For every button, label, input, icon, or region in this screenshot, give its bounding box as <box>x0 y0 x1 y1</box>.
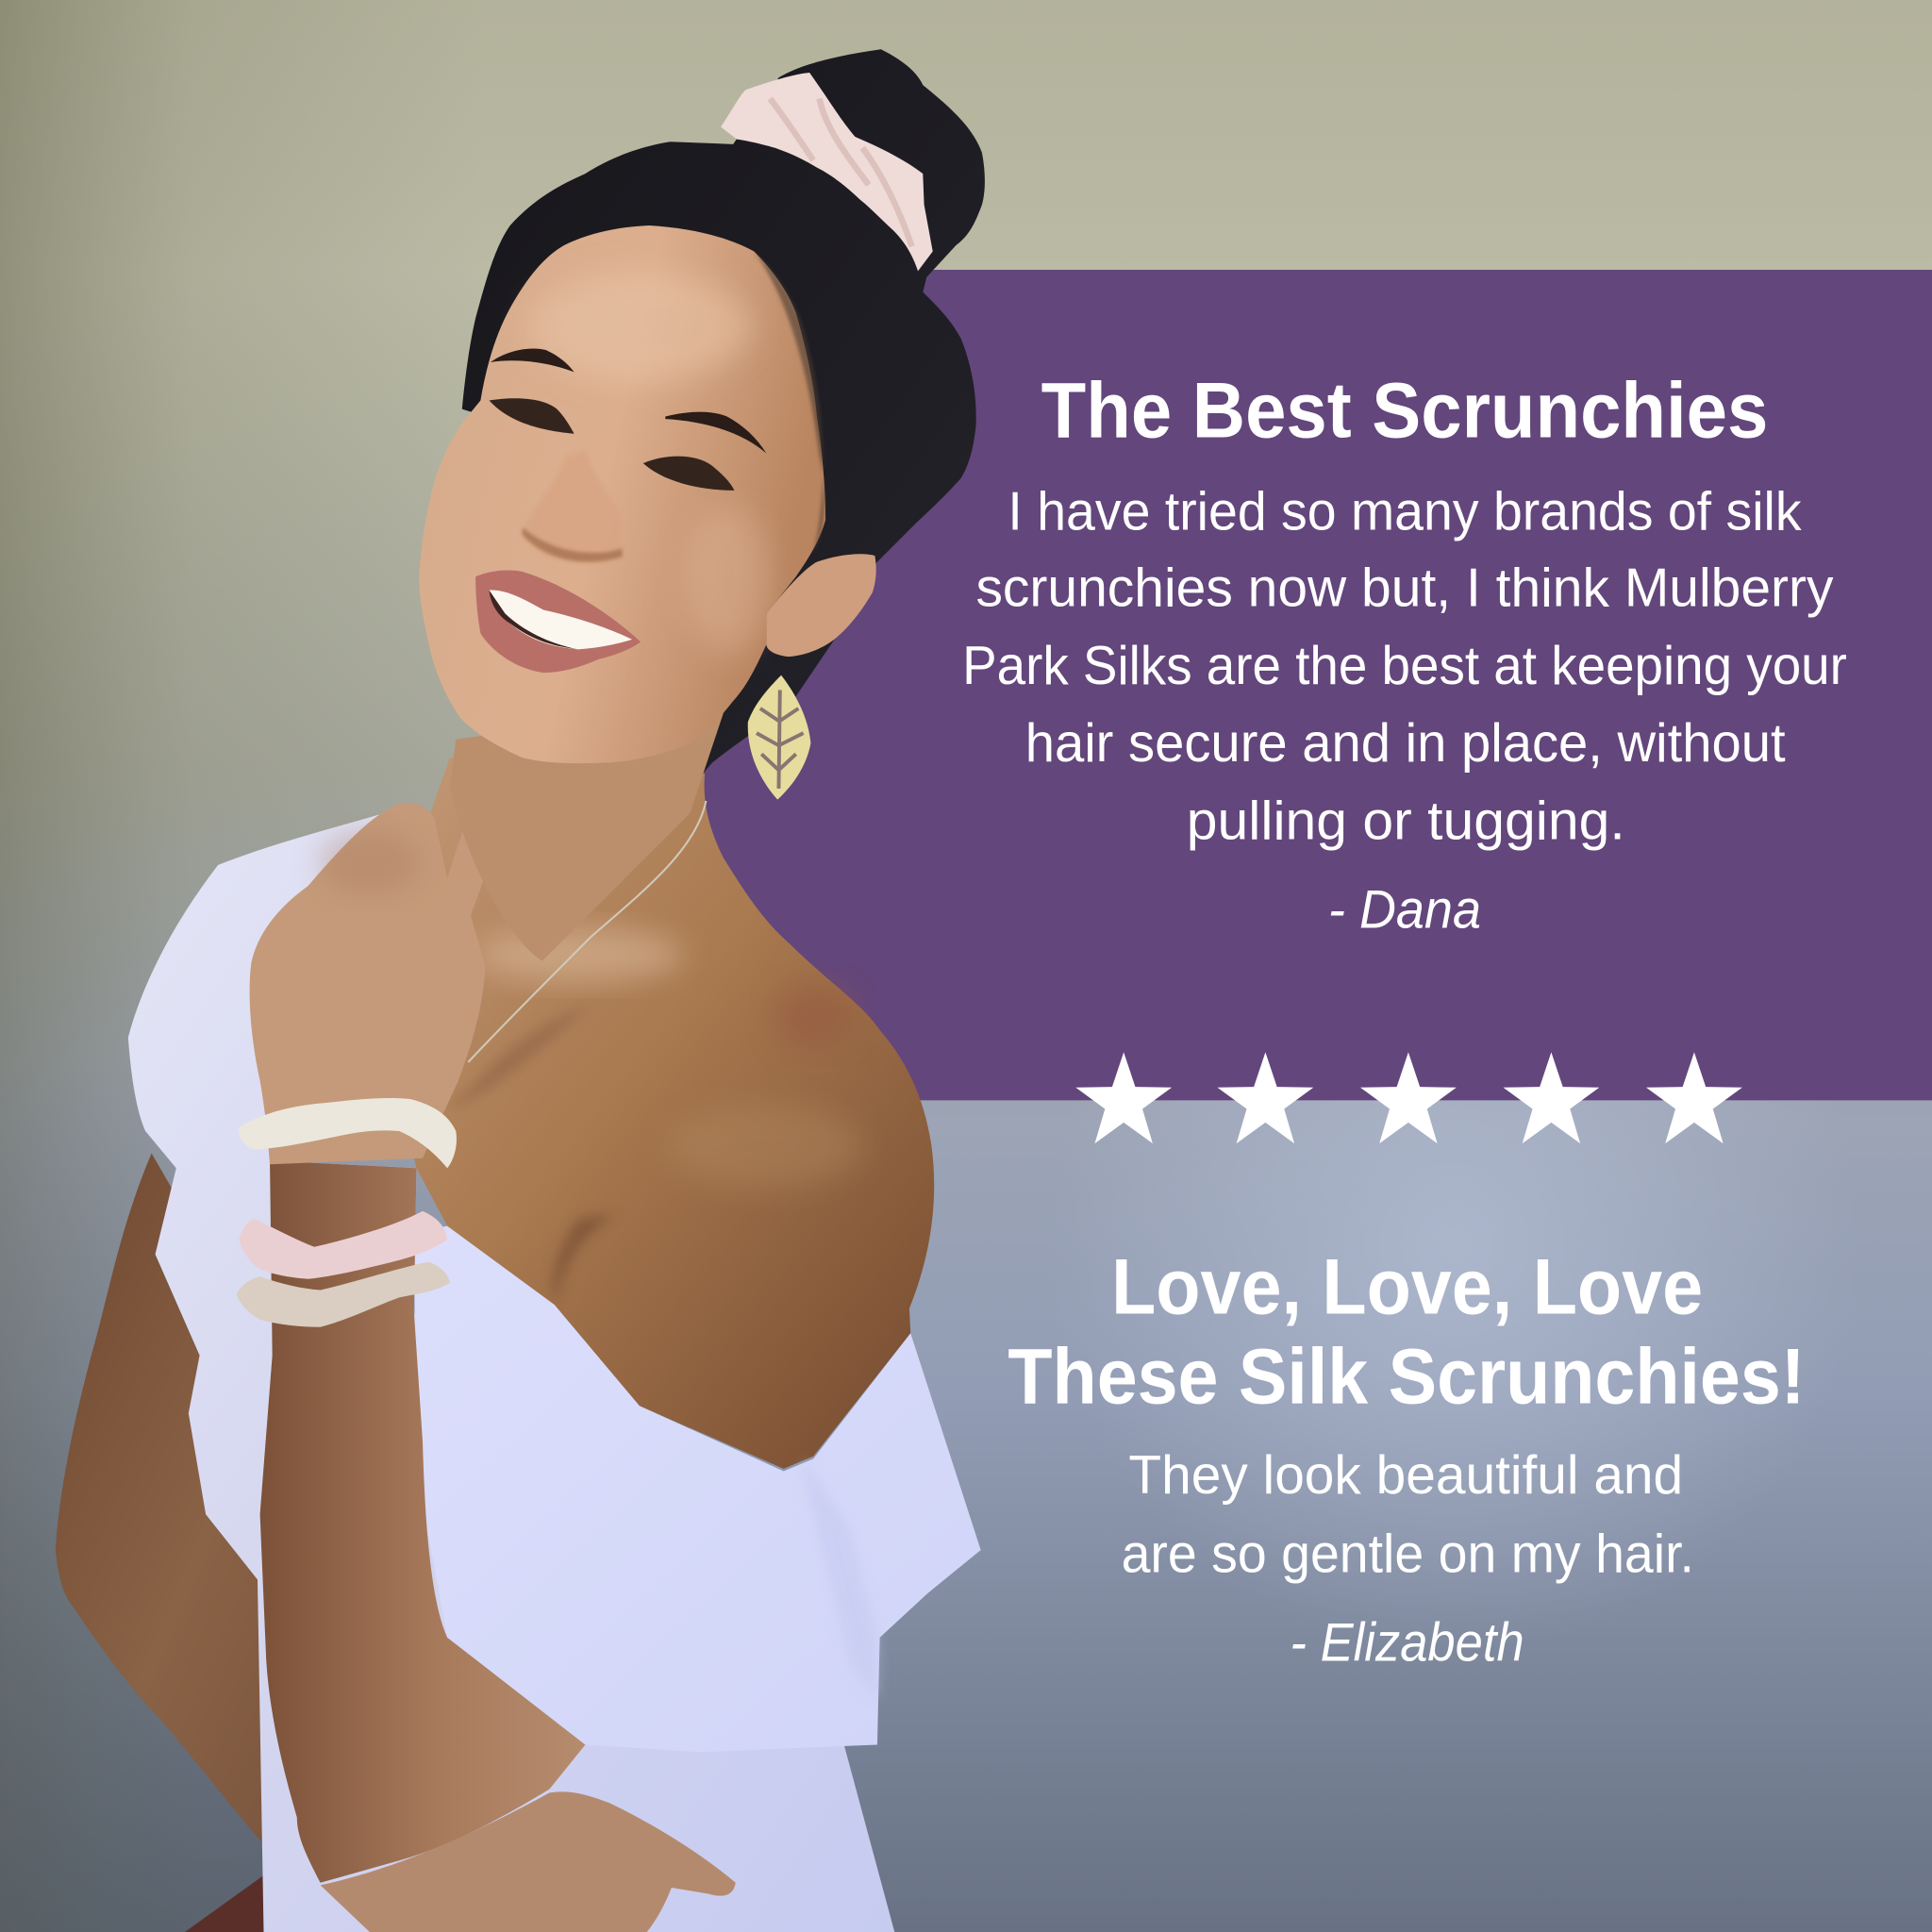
smiling mouth <box>475 570 641 673</box>
chest and shoulder <box>370 758 934 1469</box>
beige scrunchie <box>237 1261 450 1327</box>
review text <box>962 482 1847 851</box>
heading: Love, Love, Love These Silk Scrunchies! <box>1008 1241 1805 1421</box>
ear <box>766 554 876 657</box>
heading: Love, Love, Love These Silk Scrunchies!: Love, Love, Love <box>1111 1241 1703 1330</box>
wrist scrunchies <box>237 1098 457 1327</box>
earring <box>748 675 810 800</box>
review text: are so gentle on my hair. <box>1122 1524 1694 1585</box>
neck shadow <box>450 702 727 961</box>
attribution: Dana: - Dana <box>1328 880 1481 941</box>
review text: pulling or tugging. <box>1187 791 1625 851</box>
review text: They look beautiful and <box>1128 1445 1683 1506</box>
five star rating <box>1075 1052 1742 1143</box>
necklace <box>468 801 706 1062</box>
nose <box>523 450 624 564</box>
eyes and brows <box>490 348 766 491</box>
review text: I have tried so many brands of silk <box>1008 482 1802 542</box>
pink scrunchie <box>239 1211 447 1279</box>
review: Elizabeth <box>1008 1241 1805 1674</box>
review text <box>1122 1445 1694 1585</box>
hair back and bun <box>462 49 985 789</box>
woman photo illustration <box>56 49 985 1932</box>
review text: Park Silks are the best at keeping your <box>962 636 1847 696</box>
fist and thumb at neck <box>250 796 502 1164</box>
hair scrunchie <box>721 73 933 271</box>
arm: front forearm <box>260 1160 585 1883</box>
hand on waist <box>321 1791 736 1932</box>
heading: The Best Scrunchies: The Best Scrunchies <box>1041 366 1768 455</box>
dress ruffle <box>414 1226 981 1752</box>
face <box>419 225 825 763</box>
review text: scrunchies now but, I think Mulberry <box>975 558 1834 619</box>
review: Dana <box>962 366 1847 941</box>
dress body and sleeve <box>128 810 894 1932</box>
white scrunchie <box>239 1098 457 1168</box>
arm: rear upper arm and elbow <box>56 1154 370 1885</box>
review text: hair secure and in place, without <box>1025 713 1786 774</box>
heading: Love, Love, Love These Silk Scrunchies!: These Silk Scrunchies! <box>1008 1332 1805 1421</box>
panel: purple review background <box>665 270 1932 1100</box>
dark furniture corner <box>185 1875 264 1932</box>
attribution: Elizabeth: - Elizabeth <box>1291 1613 1524 1674</box>
